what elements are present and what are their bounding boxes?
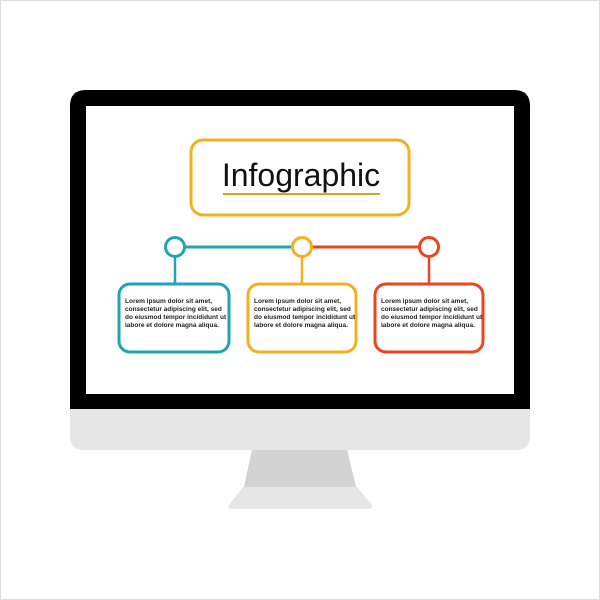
node circles bbox=[166, 238, 438, 256]
text: box 1: Lorem ipsum dolor sit amet, bbox=[125, 298, 212, 305]
boxes bbox=[119, 284, 483, 352]
text: box 1 bbox=[125, 298, 226, 329]
text: box 3: labore et dolore magna aliqua. bbox=[381, 322, 475, 329]
title box: Infographic bbox=[222, 157, 380, 193]
text: box 3: consectetur adipiscing elit, sed bbox=[381, 306, 478, 313]
connector lines bbox=[175, 247, 429, 284]
text: box 3 bbox=[381, 298, 482, 329]
text: box 2: consectetur adipiscing elit, sed bbox=[254, 306, 351, 313]
text: box 1: labore et dolore magna aliqua. bbox=[125, 322, 219, 329]
text: box 3: do eiusmod tempor incididunt ut bbox=[381, 314, 482, 321]
title box bbox=[191, 140, 409, 215]
text: box 3: Lorem ipsum dolor sit amet, bbox=[381, 298, 468, 305]
text: box 2: Lorem ipsum dolor sit amet, bbox=[254, 298, 341, 305]
text: box 2: labore et dolore magna aliqua. bbox=[254, 322, 348, 329]
monitor stand bbox=[228, 449, 372, 509]
monitor bezel bbox=[70, 90, 530, 409]
text: box 2 bbox=[254, 298, 356, 329]
screen bbox=[86, 106, 514, 394]
text: box 2: do eiusmod tempor incididunt ut bbox=[254, 314, 355, 321]
text: box 1: consectetur adipiscing elit, sed bbox=[125, 306, 222, 313]
text: box 1: do eiusmod tempor incididunt ut bbox=[125, 314, 226, 321]
monitor chin bbox=[70, 405, 530, 450]
